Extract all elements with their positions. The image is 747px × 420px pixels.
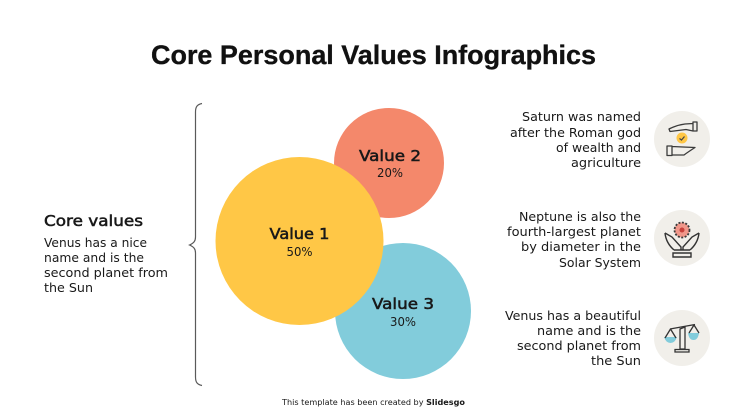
title: Core Personal Values Infographics bbox=[151, 40, 596, 70]
circle: value 3: Value 3 bbox=[372, 295, 434, 313]
text: venus: second planet from bbox=[517, 339, 641, 353]
text: saturn: of wealth and bbox=[556, 141, 641, 155]
text: venus: Venus has a beautiful bbox=[505, 309, 641, 323]
circle: value 2: Value 2 bbox=[359, 147, 421, 165]
text: saturn: after the Roman god bbox=[510, 126, 641, 140]
left description: Venus has a nice bbox=[44, 236, 147, 250]
left description: the Sun bbox=[44, 281, 93, 295]
icon: balance scale bbox=[654, 310, 710, 366]
circle: value 1 bbox=[216, 157, 384, 325]
text: venus: the Sun bbox=[591, 354, 641, 368]
circle: value 3 bbox=[335, 243, 471, 379]
circle: value 2: 20% bbox=[377, 166, 403, 180]
text: saturn: Saturn was named bbox=[522, 110, 641, 124]
text: neptune: Neptune is also the bbox=[519, 210, 641, 224]
left description: name and is the bbox=[44, 251, 144, 265]
text: saturn bbox=[510, 110, 641, 170]
text: venus: name and is the bbox=[537, 324, 641, 338]
circle: value 3: 30% bbox=[390, 315, 416, 329]
footer credit: This template has been created by Slidesgo bbox=[281, 398, 465, 407]
text: saturn: agriculture bbox=[571, 156, 641, 170]
text: neptune: fourth-largest planet bbox=[507, 225, 641, 239]
circle: value 1: Value 1 bbox=[270, 225, 330, 243]
text: neptune: by diameter in the bbox=[521, 240, 641, 254]
left description bbox=[44, 236, 168, 295]
icon: hands and flower bbox=[654, 210, 710, 266]
left description: second planet from bbox=[44, 266, 168, 280]
text: neptune: Solar System bbox=[559, 256, 641, 270]
curly brace bbox=[190, 104, 202, 386]
left text block: core values bbox=[44, 212, 168, 295]
left heading: Core values bbox=[44, 212, 143, 230]
icon: hands and coin bbox=[654, 111, 710, 167]
text: venus bbox=[505, 309, 641, 368]
text: neptune bbox=[507, 210, 641, 270]
circle: value 2 bbox=[334, 108, 444, 218]
circle: value 1: 50% bbox=[286, 245, 312, 259]
